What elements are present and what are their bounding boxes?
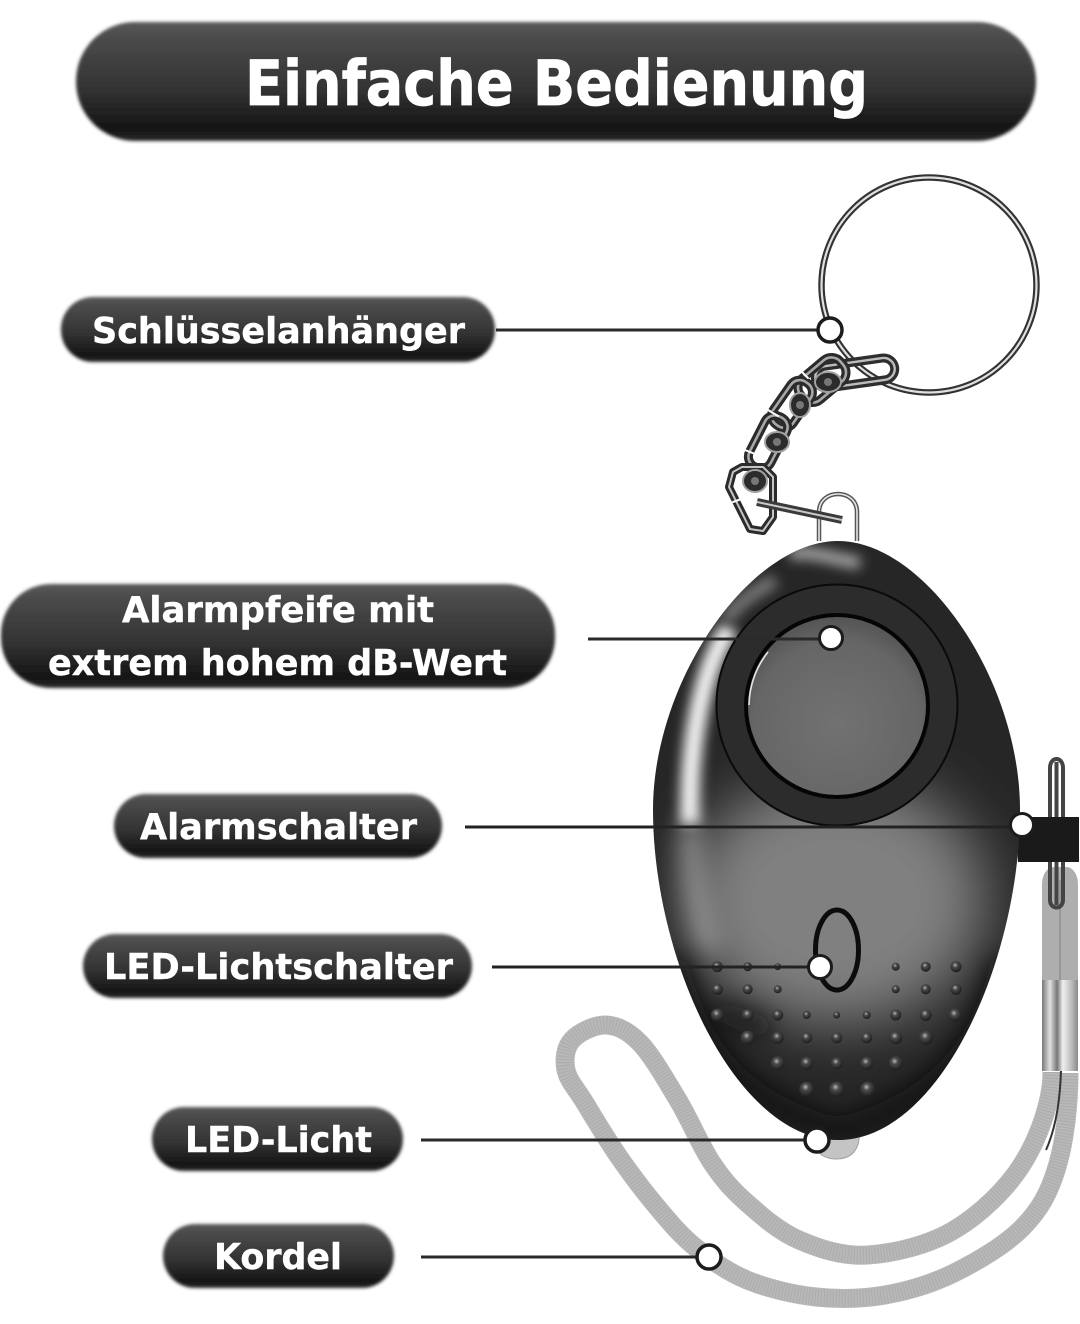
chain link 3 [767,376,817,432]
label: Alarmpfeife [1,584,555,688]
title text: Einfache Bedienung [245,47,868,120]
label: Alarmschalter: Alarmschalter [140,807,417,848]
label: Schlüsselanhänger [61,297,495,362]
alarm button [746,615,928,797]
label: Kordel: Kordel [214,1237,342,1278]
label: LED-Licht [152,1107,403,1171]
chain link 4 [793,353,851,407]
cord [565,867,1078,1299]
label: LED-Lichtschalter: LED-Lichtschalter [104,947,453,988]
chain link 1 [729,467,773,531]
chain glints [733,370,808,502]
LED switch [816,910,858,990]
upper cord strands [1042,867,1078,980]
label: LED-Lichtschalter [83,934,472,998]
label: Kordel [163,1224,394,1288]
loop and split ring [757,494,857,541]
label: LED-Licht: LED-Licht [185,1120,372,1161]
leader: Alarmpfeife [588,626,842,650]
pin key ring [1050,759,1063,908]
speaker studs [711,961,962,1097]
LED light [808,1130,859,1159]
alarm pin [1016,759,1079,908]
pin body [1016,817,1079,862]
label: Alarmpfeife: extrem hohem dB-Wert [48,643,507,684]
leader: Schlüsselanhänger [496,318,842,342]
metal sleeve [1042,980,1078,1071]
button highlight [749,652,768,705]
chain link 2 [745,412,791,472]
leader: Alarmschalter [465,814,1034,836]
alarm device body [653,541,1020,1140]
label: Alarmpfeife: Alarmpfeife mit [122,590,434,631]
alarm button ring [716,584,958,826]
leader: LED-Lichtschalter [492,956,832,978]
title banner [76,22,1036,141]
chain [729,353,896,531]
label: Alarmschalter [114,794,442,858]
label: Schlüsselanhänger: Schlüsselanhänger [92,311,465,352]
key ring [822,178,1036,392]
chain knots [743,372,841,492]
leader: LED-Licht [421,1128,829,1152]
leader: Kordel [421,1245,721,1269]
